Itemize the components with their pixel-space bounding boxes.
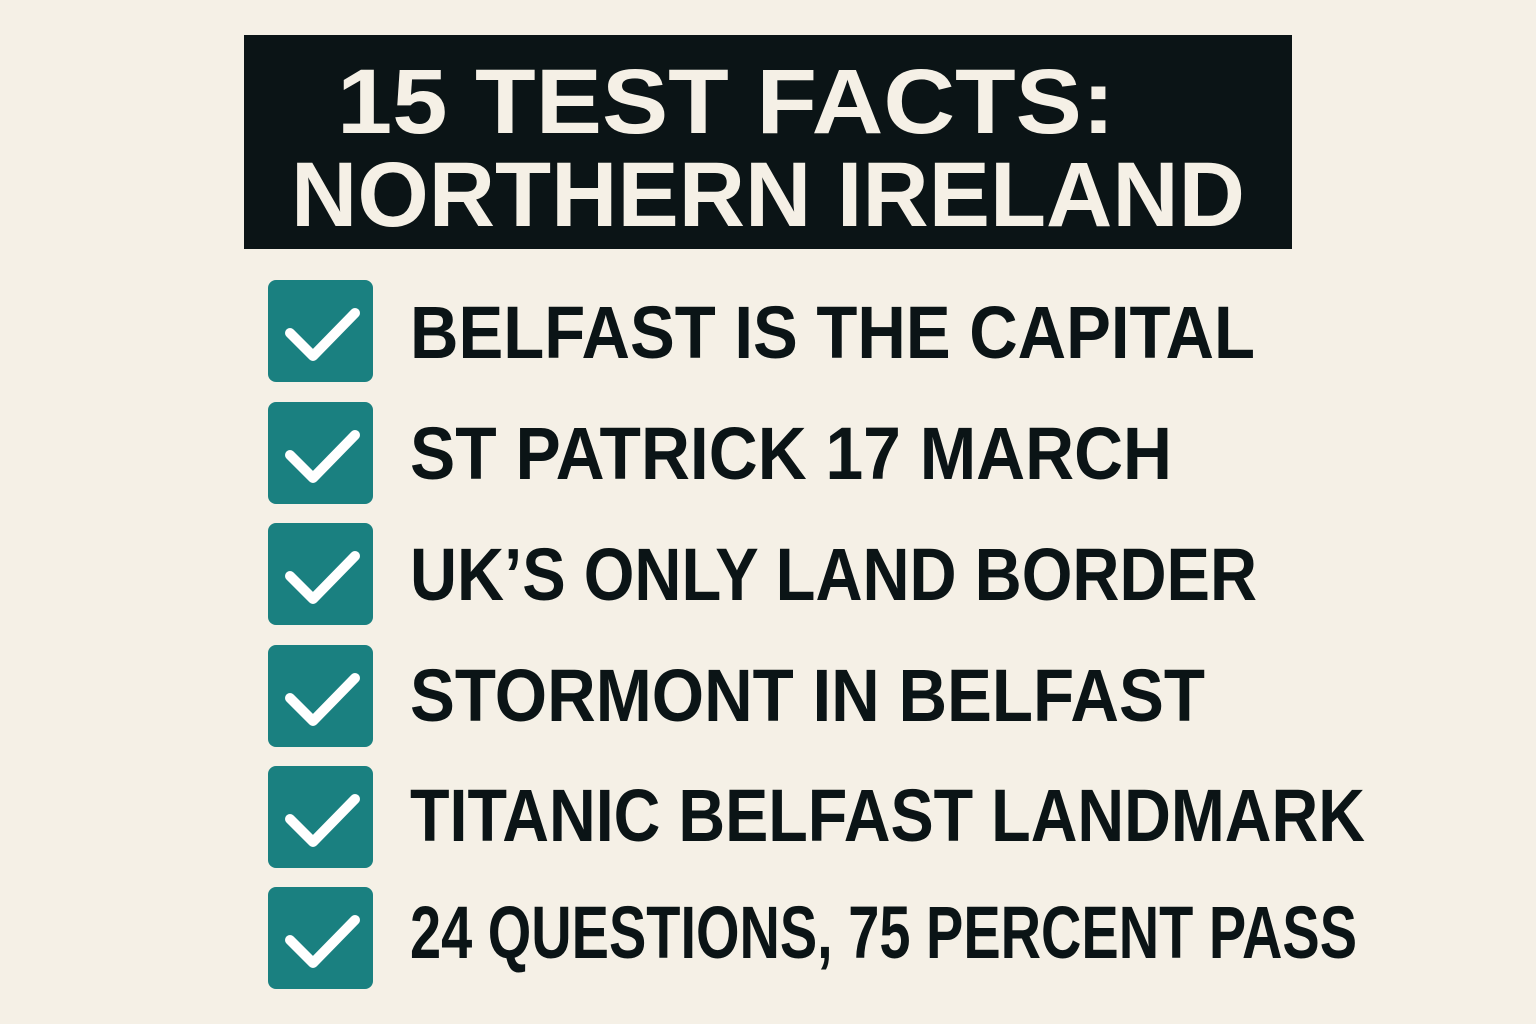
title: 15 TEST FACTS: (337, 51, 1115, 153)
fact 3 (268, 523, 1257, 625)
fact 4: STORMONT IN BELFAST (410, 654, 1205, 737)
title (244, 35, 1292, 249)
fact 5: TITANIC BELFAST LANDMARK (410, 774, 1365, 857)
fact 4 (268, 645, 1205, 747)
fact 1 (268, 280, 1255, 382)
fact 3: UK’S ONLY LAND BORDER (410, 533, 1257, 616)
fact 5 (268, 766, 1365, 868)
fact 2 (268, 402, 1172, 504)
icon: checkbox (268, 523, 373, 625)
icon: checkbox (268, 887, 373, 989)
fact 2: ST PATRICK 17 MARCH (410, 412, 1172, 495)
icon: checkbox (268, 766, 373, 868)
icon: checkbox (268, 280, 373, 382)
fact 6 (268, 887, 1357, 989)
fact 1: BELFAST IS THE CAPITAL (410, 291, 1255, 374)
icon: checkbox (268, 402, 373, 504)
title: NORTHERN IRELAND (291, 144, 1245, 246)
icon: checkbox (268, 645, 373, 747)
